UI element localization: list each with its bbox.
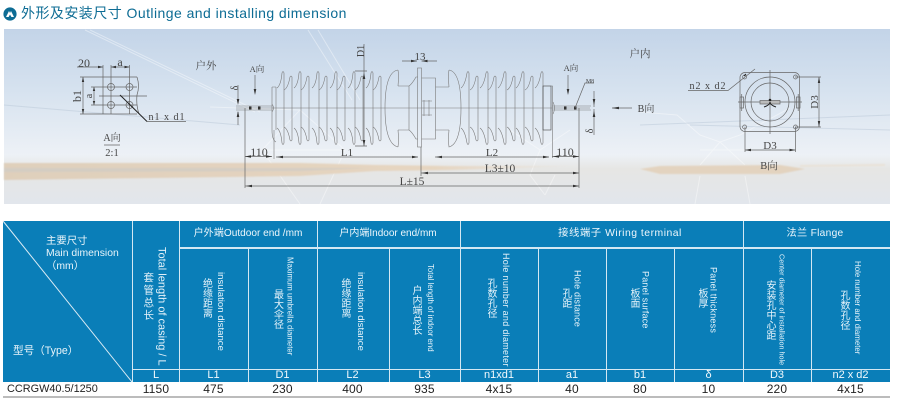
column captions: Hole number and diameter [501,253,511,367]
corner header: main dimension: （mm） [46,260,84,272]
dimension labels [196,45,654,188]
dimension labels: L2 [486,147,498,159]
A-direction terminal view: 2:1 [105,148,119,159]
column captions: Total length of indoor end [426,264,435,352]
corner header: main dimension: Main dimension [46,248,119,259]
B-direction flange view: B向 [760,159,778,172]
dimension labels: 户内 [630,47,650,60]
data row: 4x15 [486,382,512,396]
column captions: Hole number and diameter [853,261,862,354]
indoor big shed [448,70,461,147]
table header background [3,221,890,382]
corner header: main dimension [46,235,119,272]
symbol row: L3 [418,369,431,381]
dimension labels: A向 [250,64,265,74]
column captions: Panel surface [640,271,650,329]
symbol row: n1xd1 [484,369,514,381]
data row: 1150 [143,382,169,396]
group headers [194,227,844,239]
panel: outline drawing [3,29,890,204]
dimension labels: B向 [638,102,654,115]
data row: 400 [342,382,363,396]
data row: 220 [767,382,787,396]
B-direction flange view: n2 x d2 [690,81,726,92]
dimension labels: δ [585,128,596,133]
column captions: 户内端总长 [410,285,425,335]
A-direction terminal view: a [117,55,123,69]
B-direction flange view: D3 [763,140,777,152]
symbol row: L1 [207,369,220,381]
terminals [236,106,591,110]
symbol row: D1 [275,369,290,381]
data row: 230 [272,382,293,396]
terminal bolts [249,106,576,110]
horizon band [4,163,885,180]
column captions: Panel thickness [708,267,718,333]
dimension labels: 110 [556,145,574,159]
column captions: 绝缘距离 [339,278,354,318]
column captions: Total length of casing / L [156,247,168,366]
dimension labels: 110 [250,145,268,159]
data row: CCRGW40.5/1250 [7,383,98,395]
data row: 80 [633,382,647,396]
big shed and neck [385,70,418,147]
flanges [418,68,422,147]
column captions: 孔数孔径 [838,290,853,330]
symbol row: a1 [566,369,578,381]
A-direction terminal view: b1 [70,90,84,102]
symbol row: L2 [346,369,359,381]
data row: 4x15 [837,382,864,396]
symbol row: n2 x d2 [832,369,869,381]
icon: section badge [3,7,17,21]
column captions: 绝缘距离 [200,278,216,318]
column captions: 孔距 [560,288,575,308]
dimension labels: L±15 [400,176,425,188]
dimension labels: A向 [564,63,579,73]
column captions: insulation distance [215,272,226,351]
sheds [277,72,284,144]
dimension labels: D1 [356,45,367,57]
insulator outdoor end [236,68,591,159]
B-direction flange view: D3 [809,95,821,109]
dimension labels: 户外 [196,59,217,72]
A-direction terminal view: 20 [78,56,90,70]
A-direction terminal view [70,55,186,159]
title text: 外形及安装尺寸 Outlinge and installing dimension [21,5,347,21]
column captions: 套管总长 [141,272,156,322]
column captions: Center diameter of installation hole [778,254,787,365]
data row: 10 [702,382,715,396]
title [3,5,347,21]
column captions: 板厚 [696,288,711,308]
dimension labels: δ [230,85,241,90]
column captions: insulation distance [355,272,366,351]
data row: 935 [414,382,435,396]
symbol row [153,369,869,381]
A-direction terminal view: n1 x d1 [148,112,186,123]
dimension arrowheads [237,60,619,187]
column captions: Maximum umbrella diameter [285,257,294,355]
group headers: 户内端Indoor end/mm [339,228,437,239]
A-direction terminal view: a [84,93,95,98]
data row: 475 [203,382,224,396]
dimension lines [238,44,632,188]
B-direction flange view [688,69,821,172]
corner header: main dimension: 主要尺寸 [46,236,88,246]
symbol row: D3 [770,369,784,381]
column captions: 板面 [628,288,643,308]
column captions: 最大伞径 [272,289,286,329]
panel background [4,29,890,204]
group headers: 接线端子 Wiring terminal [558,228,682,239]
A-direction terminal view: A向 [103,131,121,144]
group headers: 法兰 Flange [786,228,844,239]
dimension labels: M8 [586,79,594,85]
column captions: Hole distance [572,270,582,327]
dimension labels: L1 [341,147,353,159]
corner header: type: 型号（Type） [13,345,78,357]
column captions: 孔数孔径 [485,278,500,318]
column captions: 安装孔中心距 [764,280,779,340]
group headers: 户外端Outdoor end /mm [194,228,302,239]
data row: 40 [565,382,579,396]
dimension labels: 13 [414,51,426,63]
diagonal corner line [2,220,132,382]
symbol row: δ [705,369,712,381]
symbol row: L [153,369,159,381]
dimension labels: L3±10 [485,163,516,175]
data row [3,382,890,398]
symbol row: b1 [634,369,646,381]
